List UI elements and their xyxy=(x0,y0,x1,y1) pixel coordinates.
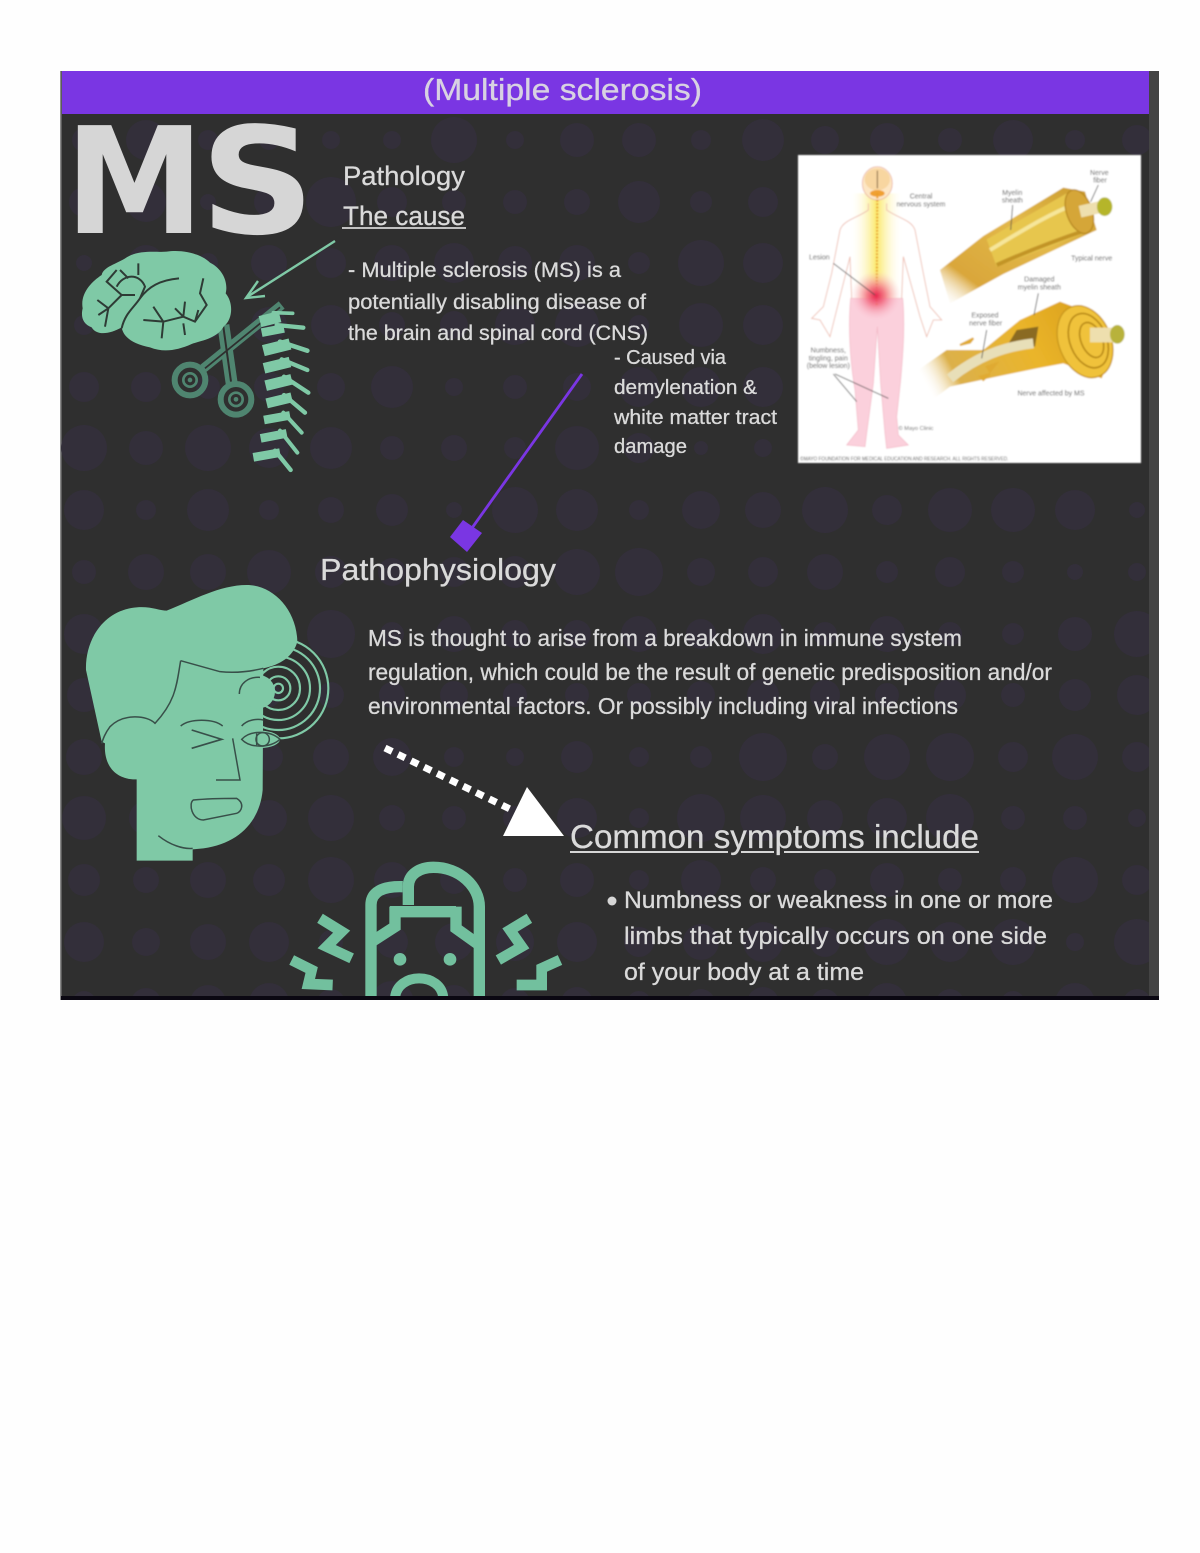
illustration labels: Lesion xyxy=(809,254,830,261)
scissors xyxy=(175,305,282,415)
illustration labels: ©MAYO FOUNDATION FOR MEDICAL EDUCATION AND RESEARCH. ALL RIGHTS RESERVED. xyxy=(800,456,1008,463)
text: caused via: white matter tract xyxy=(613,406,777,429)
text: pathophysiology description: MS is thought to arise from a breakdown in immune system xyxy=(368,625,962,651)
spine xyxy=(253,313,308,470)
list: symptoms: Numbness or weakness in one or more xyxy=(624,887,1053,914)
big MS heading: S xyxy=(200,96,315,268)
text: pathophysiology description: regulation, which could be the result of genetic predisposition and/or xyxy=(368,659,1052,685)
illustration labels: sheath xyxy=(1002,198,1023,205)
illustration labels: Exposed xyxy=(971,312,999,319)
icon: brain, scissors and spine xyxy=(82,251,308,470)
list: symptoms: of your body at a time xyxy=(624,959,864,986)
text: caused via: - Caused via xyxy=(614,346,727,369)
illustration labels: © Mayo Clinic xyxy=(899,425,934,432)
icon: face with headache xyxy=(86,585,328,861)
pointer lines xyxy=(833,185,1098,402)
arrow: dotted white xyxy=(385,748,564,836)
panel background xyxy=(61,71,1159,1000)
text: MS definition: the brain and spinal cord (CNS) xyxy=(348,322,648,345)
illustration labels: Central xyxy=(910,194,933,201)
big MS heading: M xyxy=(65,96,204,268)
arrow: purple connector with diamond xyxy=(450,374,582,552)
bottom nerve xyxy=(918,297,1125,407)
heading: Pathophysiology: Pathophysiology xyxy=(320,552,557,587)
text: caused via: demylenation & xyxy=(614,376,757,399)
text: pathophysiology description xyxy=(368,625,1052,719)
illustration labels: fiber xyxy=(1093,177,1107,184)
illustration labels xyxy=(800,170,1112,463)
header bar xyxy=(62,71,1149,114)
brain xyxy=(82,251,231,350)
list: symptoms xyxy=(608,887,1053,986)
illustration labels: Nerve affected by MS xyxy=(1017,390,1085,397)
text: pathophysiology description: environmental factors. Or possibly including viral infections xyxy=(368,693,958,719)
top nerve xyxy=(940,186,1112,303)
arrow: green to brain xyxy=(246,241,335,298)
illustration labels: nervous system xyxy=(897,201,946,208)
text: MS definition xyxy=(348,259,648,345)
text: caused via xyxy=(613,346,777,458)
text: MS definition: - Multiple sclerosis (MS) is a xyxy=(348,259,621,282)
heading: Pathology: Pathology xyxy=(343,161,466,191)
pain rings xyxy=(263,640,330,740)
illustration labels: myelin sheath xyxy=(1018,284,1061,291)
illustration labels: Typical nerve xyxy=(1071,255,1112,262)
infographic poster xyxy=(60,71,1159,1000)
illustration labels: (below lesion) xyxy=(807,363,850,370)
icon: person with head pain xyxy=(292,867,560,998)
illustration labels: Numbness, xyxy=(811,348,846,355)
heading: common symptoms: Common symptoms include xyxy=(570,818,979,855)
illustration labels: tingling, pain xyxy=(809,355,848,362)
big MS heading xyxy=(65,96,315,268)
list: symptoms: limbs that typically occurs on one side xyxy=(624,923,1047,950)
illustration labels: Myelin xyxy=(1002,190,1023,197)
text: caused via: damage xyxy=(614,435,687,458)
medical illustration: nerve and body xyxy=(798,155,1141,463)
heading: The cause: The cause xyxy=(343,201,465,231)
title: (Multiple sclerosis) xyxy=(423,72,702,107)
illustration labels: Damaged xyxy=(1024,277,1055,284)
illustration labels: nerve fiber xyxy=(969,320,1003,327)
text: MS definition: potentially disabling disease of xyxy=(348,291,646,314)
illustration labels: Nerve xyxy=(1090,170,1109,177)
body figure xyxy=(812,167,942,448)
head xyxy=(86,585,297,861)
